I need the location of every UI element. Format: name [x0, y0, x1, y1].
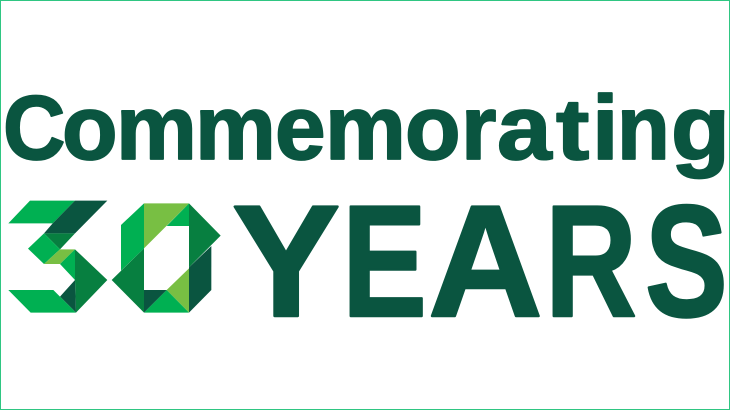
heading: Commemorating: r: [461, 78, 496, 179]
heading: YEARS: A: [428, 172, 543, 350]
numeral: 30 origami: [8, 201, 221, 313]
heading: Commemorating: o: [405, 78, 461, 179]
heading: YEARS: Y: [232, 173, 340, 351]
heading: YEARS: R: [545, 172, 637, 350]
heading: Commemorating: m: [195, 78, 276, 179]
heading: Commemorating: i: [592, 77, 619, 179]
heading: Commemorating: m: [325, 78, 406, 179]
heading: YEARS: [232, 172, 728, 351]
heading: Commemorating: e: [275, 78, 326, 179]
heading: Commemorating: g: [671, 77, 730, 178]
heading: Commemorating: C: [3, 77, 65, 178]
heading: Commemorating: o: [62, 78, 118, 179]
heading: Commemorating: n: [617, 77, 670, 178]
heading: YEARS: S: [645, 173, 728, 351]
heading: Commemorating: [3, 77, 730, 179]
heading: Commemorating: a: [497, 77, 553, 179]
heading: Commemorating: m: [116, 78, 197, 179]
digit 3: [8, 201, 107, 313]
digit 0: [112, 203, 221, 313]
heading: YEARS: E: [342, 172, 427, 350]
heading: Commemorating: t: [556, 80, 589, 177]
